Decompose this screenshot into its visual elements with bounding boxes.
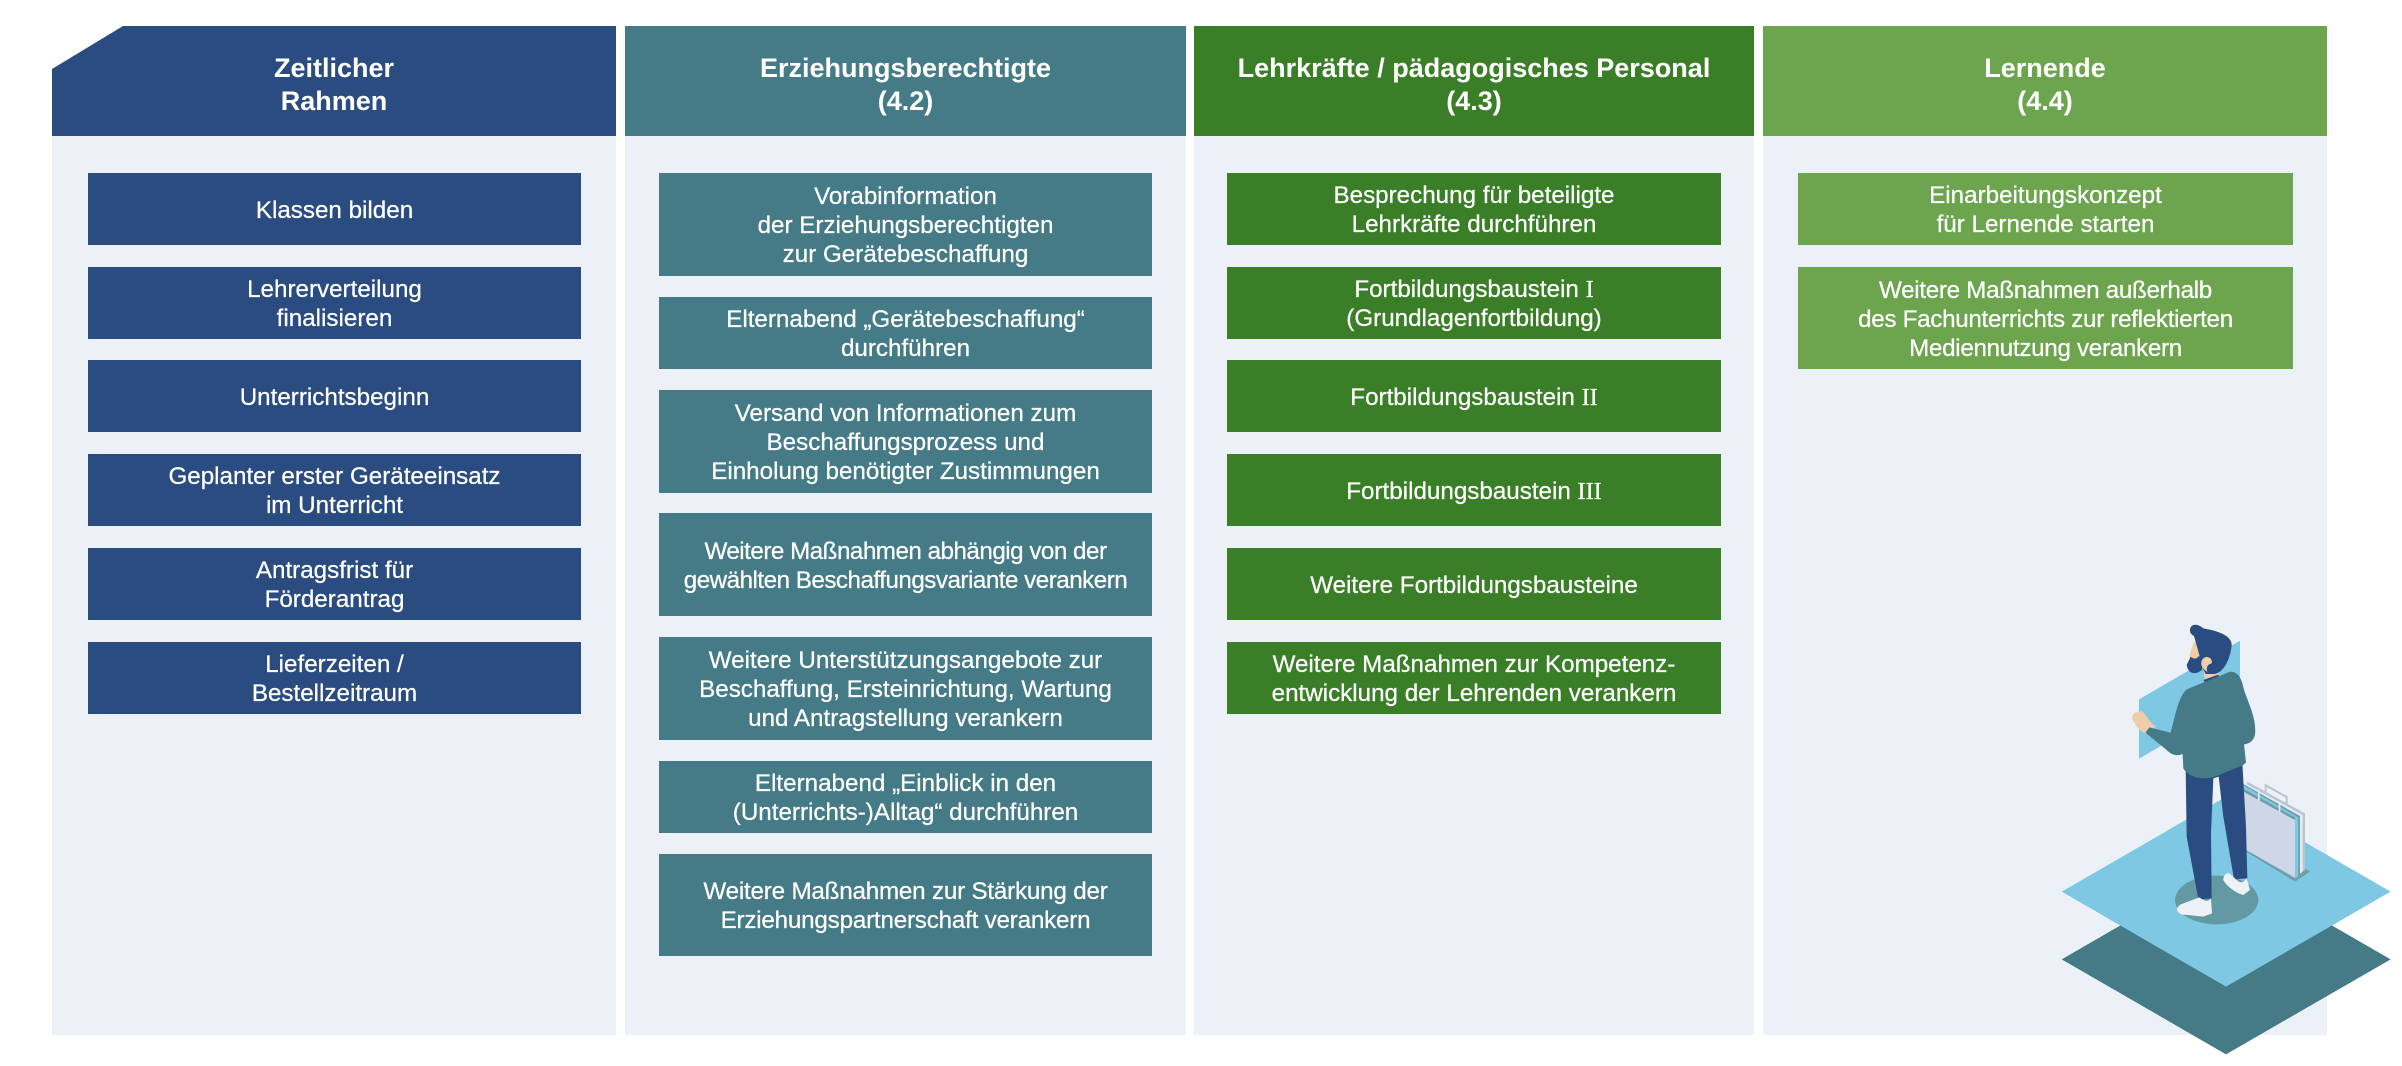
column 3 item: Fortbildungsbaustein I: [1354, 276, 1594, 303]
column 1 item: [88, 173, 581, 245]
column 2 item: Elternabend „Gerätebeschaffung“: [726, 306, 1085, 333]
column 2 item: der Erziehungsberechtigten: [758, 212, 1053, 239]
column 2 item: Beschaffung, Ersteinrichtung, Wartung: [699, 676, 1112, 703]
column 3 item: Lehrkräfte durchführen: [1352, 211, 1596, 238]
column 1 item: [88, 642, 581, 714]
column 3 item: [1227, 548, 1721, 620]
heading: Lehrkräfte / pädagogisches Personal: (4.3): [1446, 86, 1502, 116]
hand: [2132, 711, 2156, 734]
face: [2189, 642, 2201, 660]
shadow: [2175, 876, 2258, 924]
column 3 item: Weitere Maßnahmen zur Kompetenz-: [1273, 651, 1675, 678]
tablet screen: [2139, 641, 2240, 759]
column 2 item: durchführen: [841, 335, 970, 362]
heading: Lernende: Lernende: [1984, 52, 2106, 82]
column 1 item: im Unterricht: [266, 492, 403, 519]
shoes: [2177, 897, 2212, 917]
torso and arm: [2145, 672, 2255, 778]
column 3 item: [1227, 454, 1721, 526]
panel: Zeitlicher Rahmen background: [52, 136, 616, 1035]
column 3 item: [1227, 267, 1721, 339]
column 1 item: [88, 454, 581, 526]
heading: Erziehungsberechtigte: Erziehungsberechtigte: [760, 52, 1051, 82]
column 4 item: Mediennutzung verankern: [1909, 334, 2182, 362]
illustration: person on isometric platforms: [2062, 624, 2391, 1054]
column 2 item: Versand von Informationen zum: [735, 400, 1076, 427]
column 2 item: Beschaffungsprozess und: [767, 429, 1044, 456]
column 2 item: [659, 297, 1152, 369]
column 1 item: Unterrichtsbeginn: [240, 384, 429, 410]
column 1 item: Lehrerverteilung: [247, 276, 422, 303]
hair: [2190, 625, 2232, 674]
heading: Lernende: (4.4): [2017, 86, 2073, 116]
column 4 item: [1798, 173, 2293, 245]
column 2 item: [659, 637, 1152, 740]
column 3 item: [1227, 173, 1721, 245]
column 1 item: Antragsfrist für: [256, 557, 413, 584]
heading: Zeitlicher Rahmen: [52, 26, 616, 136]
panel: Erziehungsberechtigte background: [625, 136, 1186, 1035]
column 3 item: Besprechung für beteiligte: [1333, 182, 1615, 209]
column 4 item: [1798, 267, 2293, 369]
column 3 item: Weitere Fortbildungsbausteine: [1310, 572, 1638, 598]
collar: [2203, 675, 2219, 683]
column 2 item: zur Gerätebeschaffung: [783, 241, 1028, 268]
column 2 item: (Unterrichts-)Alltag“ durchführen: [733, 799, 1078, 826]
column 2 item: und Antragstellung verankern: [748, 705, 1063, 732]
column 2 item: [659, 761, 1152, 833]
heading: Erziehungsberechtigte: [625, 26, 1186, 136]
column 2 item: Weitere Maßnahmen zur Stärkung der: [703, 878, 1108, 905]
column 4 item: des Fachunterrichts zur reflektierten: [1858, 306, 2233, 332]
column 4 item: Weitere Maßnahmen außerhalb: [1879, 276, 2212, 304]
column 1 item: Geplanter erster Geräteeinsatz: [168, 463, 501, 490]
column 2 item: [659, 390, 1152, 493]
beard: [2187, 656, 2202, 673]
column 2 item: Einholung benötigter Zustimmungen: [711, 458, 1100, 485]
heading: Zeitlicher Rahmen: Rahmen: [281, 86, 387, 116]
column 2 item: [659, 854, 1152, 956]
heading: Lernende: [1763, 26, 2327, 136]
column 2 item: [659, 173, 1152, 276]
heading: Lehrkräfte / pädagogisches Personal: [1194, 26, 1754, 136]
column 1 item: finalisieren: [277, 305, 392, 332]
column 3 item: (Grundlagenfortbildung): [1346, 305, 1602, 332]
heading: Erziehungsberechtigte: (4.2): [878, 86, 933, 116]
column 1 item: [88, 267, 581, 339]
column 3 item: [1227, 360, 1721, 432]
column 2 item: Elternabend „Einblick in den: [755, 770, 1056, 797]
icon: briefcase: [2243, 782, 2310, 882]
column 3 item: [1227, 642, 1721, 714]
column 1 item: [88, 360, 581, 432]
heading: Lehrkräfte / pädagogisches Personal: Lehrkräfte / pädagogisches Personal: [1238, 52, 1710, 82]
column 4 item: Einarbeitungskonzept: [1929, 182, 2162, 209]
panel: Lernende background: [1763, 136, 2327, 1035]
column 3 item: entwicklung der Lehrenden verankern: [1272, 680, 1676, 707]
column 2 item: Erziehungspartnerschaft verankern: [721, 907, 1090, 934]
column 4 item: für Lernende starten: [1937, 211, 2154, 238]
column 2 item: [659, 513, 1152, 616]
lower platform: [2062, 864, 2391, 1054]
column 2 item: gewählten Beschaffungsvariante verankern: [684, 566, 1127, 594]
column 2 item: Weitere Maßnahmen abhängig von der: [704, 538, 1107, 564]
column 2 item: Vorabinformation: [814, 183, 997, 210]
column 1 item: Lieferzeiten /: [265, 651, 404, 678]
column 3 item: Fortbildungsbaustein III: [1346, 478, 1602, 504]
column 1 item: Bestellzeitraum: [252, 680, 417, 707]
neck: [2203, 668, 2219, 682]
column 3 item: Fortbildungsbaustein II: [1350, 384, 1598, 410]
panel: Lehrkräfte background: [1194, 136, 1754, 1035]
ear: [2201, 657, 2212, 672]
column 2 item: Weitere Unterstützungsangebote zur: [709, 647, 1102, 674]
upper platform: [2062, 797, 2391, 987]
column 1 item: [88, 548, 581, 620]
column 1 item: Förderantrag: [265, 586, 404, 613]
heading: Zeitlicher Rahmen: Zeitlicher: [274, 52, 394, 82]
column 1 item: Klassen bilden: [256, 196, 413, 224]
legs: [2186, 763, 2247, 899]
